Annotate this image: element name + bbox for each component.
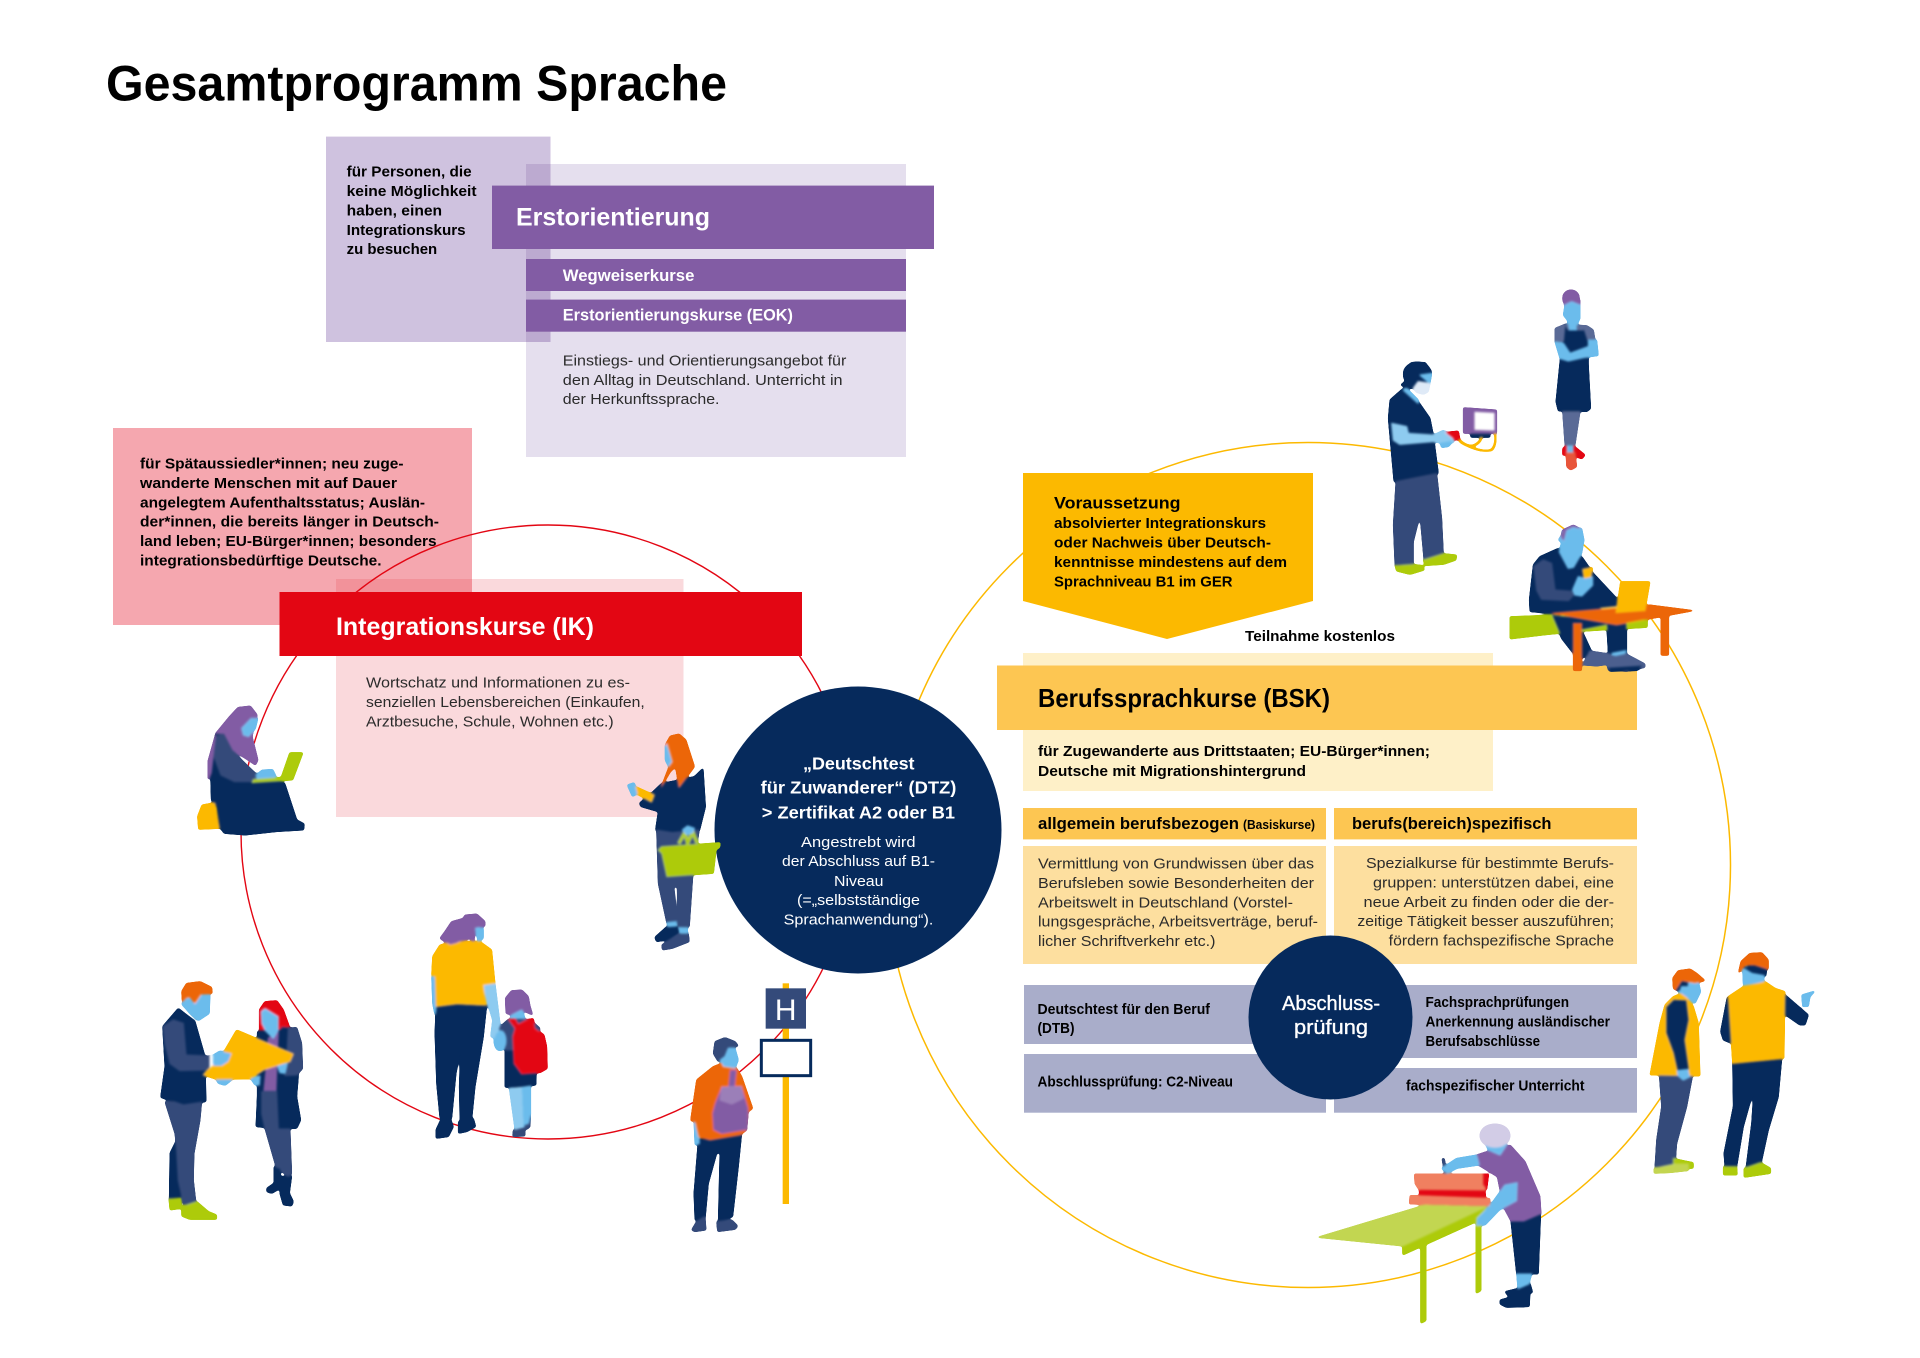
heading: Integrationskurse: Integrationskurse (IK): [336, 613, 594, 641]
heading: Integrationskurse: [280, 592, 802, 656]
figure: mother and child: [432, 914, 547, 1138]
box: Fachsprachprüfungen: Berufsabschlüsse: [1426, 1033, 1540, 1050]
box: fachspezifischer Unterricht: [1334, 1068, 1637, 1113]
panel: Voraussetzung arrow: kenntnisse mindestens auf dem: [1054, 554, 1287, 571]
text: Zielgruppe Integrationskurse: der*innen, die bereits länger in Deutsch-: [140, 514, 439, 530]
text: Zielgruppe Berufssprachkurse: Deutsche mit Migrationshintergrund: [1038, 763, 1306, 780]
box: Deutschtest für den Beruf: (DTB): [1038, 1020, 1074, 1037]
column: berufs(bereich)spezifisch: neue Arbeit zu finden oder die der-: [1364, 894, 1614, 911]
text: Zielgruppe Integrationskurse: land leben; EU-Bürger*innen; besonders: [140, 533, 437, 550]
circle: Deutschtest für Zuwanderer: Angestrebt wird: [801, 834, 916, 851]
column: allgemein berufsbezogen: licher Schriftverkehr etc.): [1038, 933, 1216, 950]
text: Beschreibung Integrationskurse: senziellen Lebensbereichen (Einkaufen,: [366, 694, 645, 711]
box: Fachsprachprüfungen: [1334, 985, 1637, 1058]
text: Zielgruppe Erstorientierung: zu besuchen: [347, 241, 437, 258]
column: allgemein berufsbezogen: lungsgespräche, Arbeitsverträge, beruf-: [1038, 914, 1318, 930]
text: Zielgruppe Erstorientierung: haben, einen: [347, 202, 442, 219]
box: Fachsprachprüfungen: Fachsprachprüfungen: [1426, 994, 1569, 1011]
column: allgemein berufsbezogen: (Basiskurse): [1243, 818, 1315, 832]
box: fachspezifischer Unterricht: fachspezifischer Unterricht: [1406, 1078, 1585, 1095]
column: allgemein berufsbezogen: Berufsleben sowie Besonderheiten der: [1038, 875, 1314, 892]
circle: Abschlussprüfung: prüfung: [1294, 1017, 1368, 1039]
text: Zielgruppe Integrationskurse: integrationsbedürftige Deutsche.: [140, 552, 382, 570]
figure: bus stop sign: H: [775, 994, 796, 1027]
panel: Voraussetzung arrow: absolvierter Integrationskurs: [1054, 515, 1266, 532]
title: Gesamtprogramm Sprache: [106, 56, 727, 112]
circle: Deutschtest für Zuwanderer: [714, 686, 1002, 974]
column: berufs(bereich)spezifisch: fördern fachspezifische Sprache: [1389, 932, 1614, 950]
figure: bus stop sign: [761, 983, 811, 1204]
bar: Erstorientierungskurse: Erstorientierungskurse (EOK): [563, 306, 793, 324]
text: Beschreibung Erstorientierung: Einstiegs- und Orientierungsangebot für: [563, 353, 846, 370]
heading: Berufssprachkurse: Berufssprachkurse (BSK): [1038, 683, 1330, 713]
text: Beschreibung Integrationskurse: Arztbesuche, Schule, Wohnen etc.): [366, 714, 614, 731]
column: allgemein berufsbezogen: Vermittlung von Grundwissen über das: [1038, 856, 1314, 872]
circle: Deutschtest für Zuwanderer: Sprachanwendung“).: [784, 912, 933, 929]
text: Zielgruppe Integrationskurse: angelegtem Aufenthaltsstatus; Auslän-: [140, 494, 425, 511]
panel: Erstorientierung: [326, 137, 934, 457]
text: Zielgruppe Berufssprachkurse: für Zugewanderte aus Drittstaaten; EU-Bürger*innen;: [1038, 743, 1430, 760]
column: berufs(bereich)spezifisch: berufs(bereich)spezifisch: [1352, 814, 1552, 833]
circle: Deutschtest für Zuwanderer: für Zuwanderer“ (DTZ): [761, 778, 956, 798]
ring: Berufssprachkurse: [886, 442, 1730, 1288]
bar: Erstorientierungskurse: [526, 300, 906, 332]
panel: Voraussetzung arrow: Voraussetzung: [1054, 494, 1180, 512]
bar: Wegweiserkurse: Wegweiserkurse: [563, 266, 694, 285]
text: Zielgruppe Erstorientierung: [347, 164, 477, 258]
circle: Deutschtest für Zuwanderer: > Zertifikat A2 oder B1: [762, 802, 955, 822]
panel: Voraussetzung arrow: [1023, 473, 1313, 639]
label: Teilnahme kostenlos: Teilnahme kostenlos: [1245, 628, 1395, 645]
text: Zielgruppe Integrationskurse: für Spätaussiedler*innen; neu zuge-: [140, 455, 404, 472]
column: allgemein berufsbezogen: Arbeitswelt in Deutschland (Vorstel-: [1038, 894, 1293, 912]
figure: woman with apron: [1555, 290, 1598, 470]
figure: man at table with laptop: [1510, 525, 1694, 671]
circle: Deutschtest für Zuwanderer: „Deutschtest: [803, 754, 915, 774]
figure: man waiting with backpack: [691, 1038, 753, 1232]
figure: two workers with vests: [1650, 953, 1815, 1177]
column: allgemein berufsbezogen: allgemein berufsbezogen: [1038, 814, 1239, 833]
circle: Deutschtest für Zuwanderer: der Abschluss auf B1-: [782, 853, 935, 870]
circle: Abschlussprüfung: [1248, 936, 1412, 1100]
column: berufs(bereich)spezifisch: [1334, 808, 1637, 964]
figure: woman writing at table: [1317, 1124, 1541, 1323]
text: Beschreibung Integrationskurse: Wortschatz und Informationen zu es-: [366, 674, 630, 692]
figure: woman with phone and basket: [627, 734, 720, 950]
box: Fachsprachprüfungen: Anerkennung ausländischer: [1426, 1014, 1610, 1031]
text: Beschreibung Erstorientierung: den Alltag in Deutschland. Unterricht in: [563, 372, 843, 389]
figure: woman with laptop: [198, 706, 304, 835]
circle: Deutschtest für Zuwanderer: Niveau: [834, 873, 884, 890]
panel: Voraussetzung arrow: Sprachniveau B1 im GER: [1054, 574, 1233, 591]
column: allgemein berufsbezogen: [1023, 808, 1326, 964]
panel: Integrationskurse: [139, 455, 802, 731]
text: Zielgruppe Erstorientierung: für Personen, die: [347, 164, 472, 180]
text: Beschreibung Integrationskurse: [366, 674, 645, 731]
ring: Integrationskurse background panels: [113, 428, 855, 1139]
heading: Erstorientierung: [492, 186, 934, 249]
text: Zielgruppe Integrationskurse: [139, 455, 439, 570]
column: berufs(bereich)spezifisch: Spezialkurse für bestimmte Berufs-: [1366, 855, 1614, 872]
box: Abschlussprüfung C2-Niveau: [1024, 1054, 1326, 1113]
box: Deutschtest für den Beruf: Deutschtest für den Beruf: [1038, 1001, 1211, 1018]
column: berufs(bereich)spezifisch: gruppen: unterstützen dabei, eine: [1373, 874, 1614, 892]
column: berufs(bereich)spezifisch: zeitige Tätigkeit besser auszuführen;: [1357, 913, 1614, 930]
text: Beschreibung Erstorientierung: der Herkunftssprache.: [563, 391, 720, 408]
figure: couple with map: [161, 982, 303, 1219]
text: Beschreibung Erstorientierung: [563, 353, 846, 408]
bar: Wegweiserkurse: [526, 259, 906, 291]
text: Zielgruppe Berufssprachkurse: [1038, 743, 1430, 780]
panel: Berufssprachkurse: [997, 653, 1637, 1113]
box: Deutschtest für den Beruf: [1024, 985, 1326, 1044]
figure: technician with device: [1388, 362, 1497, 574]
circle: Abschlussprüfung: Abschluss-: [1282, 993, 1380, 1015]
text: Zielgruppe Erstorientierung: Integrationskurs: [347, 222, 466, 239]
heading: Berufssprachkurse: [997, 666, 1637, 730]
circle: Deutschtest für Zuwanderer: (=„selbstständige: [797, 892, 920, 909]
panel: Voraussetzung arrow: oder Nachweis über Deutsch-: [1054, 535, 1271, 552]
box: Abschlussprüfung C2-Niveau: Abschlussprüfung: C2-Niveau: [1038, 1074, 1233, 1091]
heading: Erstorientierung: Erstorientierung: [516, 204, 710, 232]
text: Zielgruppe Integrationskurse: wanderte Menschen mit auf Dauer: [139, 475, 397, 492]
text: Zielgruppe Erstorientierung: keine Möglichkeit: [347, 183, 477, 200]
